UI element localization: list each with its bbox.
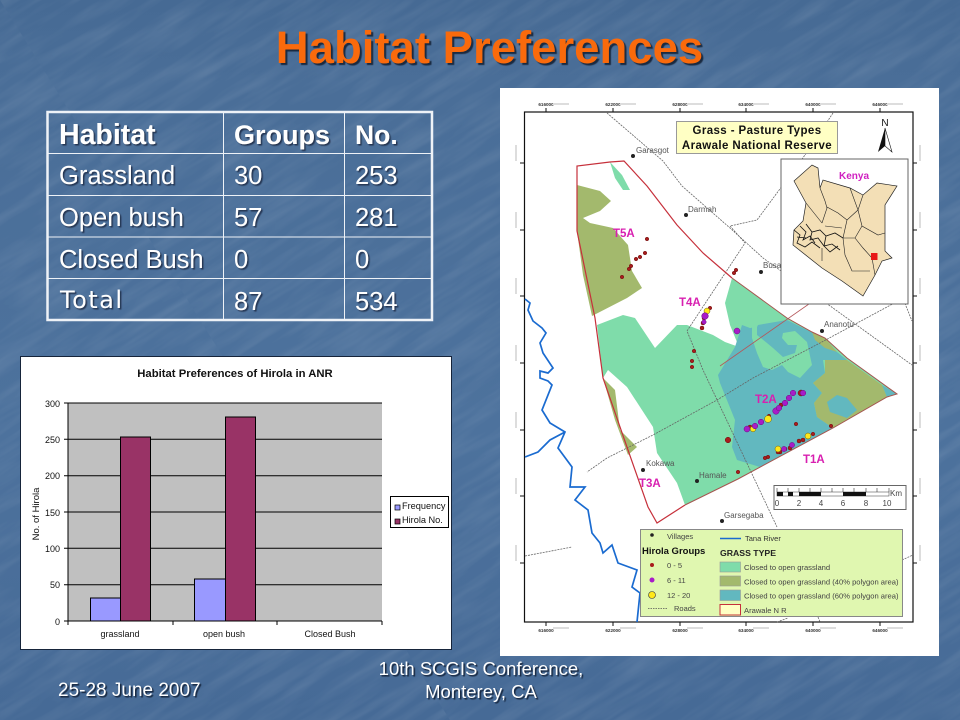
map legend: Hirola Groups (642, 546, 705, 557)
map legend: 0 - 5 (667, 561, 682, 570)
axis labels: 0 (55, 617, 60, 627)
map legend: Roads (674, 604, 696, 613)
scale bar: 0 (775, 499, 780, 508)
village labels: Garasgot (636, 146, 670, 155)
scale bar: 10 (883, 499, 892, 508)
table: habitat groups and numbers: Grassland (59, 162, 175, 190)
transect labels: T2A (755, 394, 777, 406)
table: habitat groups and numbers: 30 (234, 162, 262, 190)
scale bar: 4 (819, 499, 824, 508)
map coordinate ticks: 616000 (538, 102, 554, 107)
habitat polygons (577, 162, 897, 505)
map coordinate ticks: 634000 (738, 102, 754, 107)
map legend: 12 - 20 (667, 591, 690, 600)
village labels (631, 146, 854, 523)
table: habitat groups and numbers: 87 (234, 288, 262, 316)
Tana River (525, 299, 640, 622)
axis labels: open bush (203, 629, 245, 639)
footer: conference: Monterey, CA (425, 681, 538, 702)
transect labels: T3A (639, 478, 661, 490)
axis labels: 200 (45, 471, 60, 481)
map coordinate ticks: 634000 (738, 628, 754, 633)
axis labels: 150 (45, 508, 60, 518)
map title box: Arawale National Reserve (682, 140, 832, 152)
table: habitat groups and numbers: 534 (355, 288, 398, 316)
table: habitat groups and numbers: 57 (234, 204, 262, 232)
scale bar: 2 (797, 499, 802, 508)
map legend: Villages (667, 532, 693, 541)
chart legend (390, 496, 448, 528)
chart legend: Frequency (402, 501, 446, 511)
title: Habitat Preferences (276, 22, 703, 73)
table: habitat groups and numbers: 0 (234, 246, 248, 274)
chart legend: Hirola No. (402, 515, 443, 525)
map legend: Closed to open grassland (60% polygon area) (744, 592, 899, 600)
table: habitat groups and numbers: Open bush (59, 204, 184, 232)
village labels: Ananotu (824, 320, 854, 329)
village labels: Darmah (688, 205, 716, 214)
map title box (676, 122, 838, 154)
transect labels: T5A (613, 228, 635, 240)
table: habitat groups and numbers: Total (59, 286, 124, 314)
village labels: Hamale (699, 471, 727, 480)
map coordinate ticks (538, 102, 888, 633)
icon: north arrow: N (881, 118, 889, 129)
Kenya inset map (781, 159, 908, 304)
map coordinate ticks: 640000 (805, 102, 821, 107)
map coordinate ticks: 646000 (872, 628, 888, 633)
inset label: Kenya (839, 171, 869, 182)
map legend: 6 - 11 (667, 576, 686, 585)
scale bar (774, 486, 906, 510)
table: habitat groups and numbers: 253 (355, 162, 398, 190)
map coordinate ticks: 628000 (672, 102, 688, 107)
map coordinate ticks: 616000 (538, 628, 554, 633)
hirola group points (620, 237, 833, 474)
bars (90, 417, 256, 621)
axis labels: 250 (45, 435, 60, 445)
scale bar: Km (890, 489, 902, 498)
map frame (524, 112, 913, 622)
map coordinate ticks: 622000 (605, 102, 621, 107)
table: habitat groups and numbers: Closed Bush (59, 246, 204, 274)
axis labels: 100 (45, 544, 60, 554)
scale bar: 8 (864, 499, 869, 508)
axis labels: 50 (50, 580, 60, 590)
bar chart panel (20, 356, 452, 650)
map legend: Arawale N R (744, 606, 787, 615)
map legend: Closed to open grassland (744, 563, 830, 572)
footer: conference: 10th SCGIS Conference, (379, 658, 583, 679)
reserve boundary (577, 161, 732, 523)
map coordinate ticks: 628000 (672, 628, 688, 633)
axis labels: grassland (100, 629, 140, 639)
inset location marker (871, 253, 878, 260)
table: habitat groups and numbers: 0 (355, 246, 369, 274)
map legend: Tana River (745, 534, 781, 543)
village labels: Garsegaba (724, 511, 764, 520)
footer: date: 25-28 June 2007 (58, 680, 201, 701)
table: habitat groups and numbers: Habitat (59, 119, 156, 151)
map title box: Grass - Pasture Types (692, 125, 822, 137)
table: habitat groups and numbers: No. (355, 120, 398, 150)
transect labels (613, 228, 825, 490)
roads (525, 113, 913, 622)
transect labels: T4A (679, 297, 701, 309)
table: habitat groups and numbers: 281 (355, 204, 398, 232)
map legend (640, 530, 902, 616)
scale bar: 6 (841, 499, 846, 508)
chart title: Habitat Preferences of Hirola in ANR (137, 368, 333, 380)
table: habitat groups and numbers: Groups (234, 120, 330, 150)
map panel (500, 88, 939, 656)
footer: conference (379, 658, 583, 702)
axis labels: 300 (45, 399, 60, 409)
map coordinate ticks: 622000 (605, 628, 621, 633)
transect labels: T1A (803, 454, 825, 466)
map legend: GRASS TYPE (720, 548, 776, 558)
axis labels: No. of Hirola (31, 487, 42, 540)
table: habitat groups and numbers (47, 112, 432, 320)
axis labels: Closed Bush (304, 629, 356, 639)
village labels: Kokawa (646, 459, 675, 468)
icon: north arrow (878, 118, 892, 152)
map coordinate ticks: 640000 (805, 628, 821, 633)
plot area (68, 403, 382, 621)
axis labels (31, 399, 356, 639)
inset leader line (720, 260, 872, 366)
village labels: Busa (763, 261, 782, 270)
map legend: Closed to open grassland (40% polygon area) (744, 578, 899, 586)
map coordinate ticks: 646000 (872, 102, 888, 107)
